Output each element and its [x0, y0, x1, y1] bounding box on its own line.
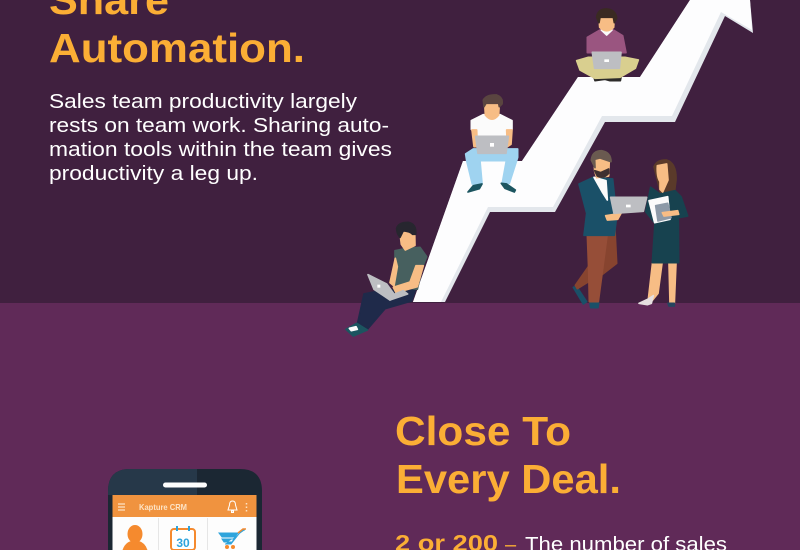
heading: Close To Every Deal: Close To	[395, 408, 571, 454]
icon: contact person	[122, 525, 148, 550]
panel: top dark background	[0, 0, 800, 303]
panel: bottom lighter background	[0, 303, 800, 550]
text block: automation description: mation tools within the team gives	[49, 139, 392, 161]
text block: automation description	[49, 91, 392, 185]
icon: overflow dots	[246, 503, 248, 512]
icon: calendar	[171, 526, 195, 550]
heading: Share Automation: Automation.	[49, 25, 305, 71]
icon: man sitting at the base of the arrow with laptop	[346, 222, 427, 336]
icon: menu bars	[118, 504, 125, 510]
icon: woman standing with documents	[639, 160, 688, 306]
icon: person sitting cross-legged on the top step with laptop	[577, 9, 638, 81]
heading: Close To Every Deal: Every Deal.	[396, 456, 621, 502]
icon: bell	[228, 501, 237, 512]
icon: bearded man standing with laptop	[573, 151, 647, 308]
app title: Kapture CRM	[139, 502, 187, 512]
heading: Close To Every Deal	[395, 408, 621, 502]
icon: man sitting on the middle step with laptop	[466, 95, 518, 192]
text block: automation description: productivity a leg up.	[49, 163, 258, 185]
arrow: rising white stepped arrow	[413, 0, 753, 302]
text block: automation description: Sales team productivity largely	[49, 91, 357, 113]
heading: Share Automation	[49, 0, 305, 71]
text block: number of sales	[395, 530, 727, 550]
icon: shopping cart	[219, 529, 246, 549]
text block: automation description: rests on team work. Sharing auto-	[49, 115, 389, 137]
icon: calendar: 30	[176, 536, 190, 550]
icon: smartphone with Kapture CRM app	[108, 469, 262, 550]
